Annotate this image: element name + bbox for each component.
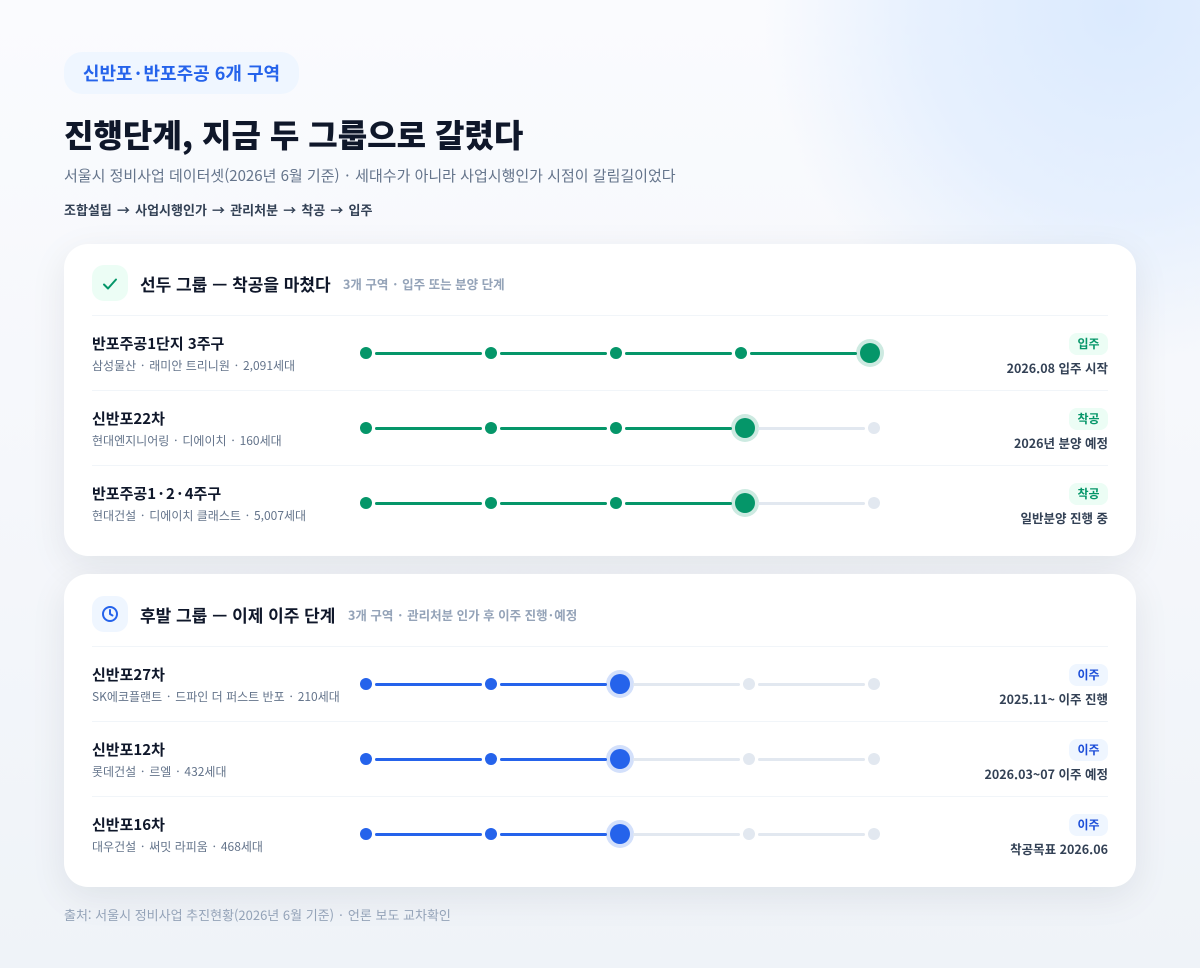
status note: 2026.08 입주 시작 xyxy=(1007,358,1108,377)
site name: 신반포12차 xyxy=(92,739,165,760)
status tag xyxy=(1069,739,1108,761)
heading: leading group: 선두 그룹 — 착공을 마쳤다 xyxy=(140,271,331,296)
row: 신반포22차 xyxy=(92,390,1108,465)
icon: clock xyxy=(92,596,128,632)
status tag: 이주 xyxy=(1077,741,1100,758)
status note: 일반분양 진행 중 xyxy=(1020,508,1108,527)
row: 신반포27차 xyxy=(92,646,1108,721)
site detail: 롯데건설 · 르엘 · 432세대 xyxy=(92,763,226,780)
site detail: 대우건설 · 써밋 라피움 · 468세대 xyxy=(92,838,263,855)
site detail: 현대엔지니어링 · 디에이치 · 160세대 xyxy=(92,432,282,449)
progress track xyxy=(360,339,884,367)
status tag xyxy=(1069,664,1108,686)
progress track xyxy=(360,820,880,848)
progress track xyxy=(360,489,880,517)
title: 진행단계, 지금 두 그룹으로 갈렸다 xyxy=(64,111,523,157)
site detail: 현대건설 · 디에이치 클래스트 · 5,007세대 xyxy=(92,507,306,524)
status tag: 착공 xyxy=(1077,485,1100,502)
progress track xyxy=(360,414,880,442)
badge: area label xyxy=(64,52,299,94)
icon: check xyxy=(92,265,128,301)
row: 신반포12차 xyxy=(92,721,1108,796)
status note: 2025.11~ 이주 진행 xyxy=(999,689,1108,708)
heading note: 3개 구역 · 입주 또는 분양 단계 xyxy=(343,274,505,293)
status tag xyxy=(1069,408,1108,430)
subtitle: 서울시 정비사업 데이터셋(2026년 6월 기준) · 세대수가 아니라 사업시행인가 시점이 갈림길이었다 xyxy=(64,165,676,186)
badge: area label: 신반포·반포주공 6개 구역 xyxy=(83,60,280,86)
status tag: 입주 xyxy=(1077,335,1100,352)
progress track xyxy=(360,670,880,698)
status tag: 착공 xyxy=(1077,410,1100,427)
status tag xyxy=(1069,814,1108,836)
site name: 신반포16차 xyxy=(92,814,165,835)
panel: following group xyxy=(64,574,1136,887)
status tag xyxy=(1069,333,1108,355)
status note: 착공목표 2026.06 xyxy=(1010,839,1108,858)
status tag: 이주 xyxy=(1077,666,1100,683)
progress track xyxy=(360,745,880,773)
site detail: 삼성물산 · 래미안 트리니원 · 2,091세대 xyxy=(92,357,295,374)
site name: 신반포22차 xyxy=(92,408,165,429)
row: 반포주공1·2·4주구 xyxy=(92,465,1108,540)
site name: 신반포27차 xyxy=(92,664,165,685)
source note: 출처: 서울시 정비사업 추진현황(2026년 6월 기준) · 언론 보도 교차확인 xyxy=(64,905,451,924)
status tag: 이주 xyxy=(1077,816,1100,833)
site name: 반포주공1단지 3주구 xyxy=(92,333,224,354)
status note: 2026년 분양 예정 xyxy=(1014,433,1108,452)
panel: leading group xyxy=(64,244,1136,556)
row: 반포주공1단지 3주구 xyxy=(92,315,1108,390)
stage flow: 조합설립 → 사업시행인가 → 관리처분 → 착공 → 입주 xyxy=(64,200,372,219)
heading: following group: 후발 그룹 — 이제 이주 단계 xyxy=(140,602,335,627)
status tag xyxy=(1069,483,1108,505)
site name: 반포주공1·2·4주구 xyxy=(92,483,221,504)
heading note: 3개 구역 · 관리처분 인가 후 이주 진행·예정 xyxy=(348,605,577,624)
row: 신반포16차 xyxy=(92,796,1108,871)
site detail: SK에코플랜트 · 드파인 더 퍼스트 반포 · 210세대 xyxy=(92,688,340,705)
status note: 2026.03~07 이주 예정 xyxy=(985,764,1108,783)
